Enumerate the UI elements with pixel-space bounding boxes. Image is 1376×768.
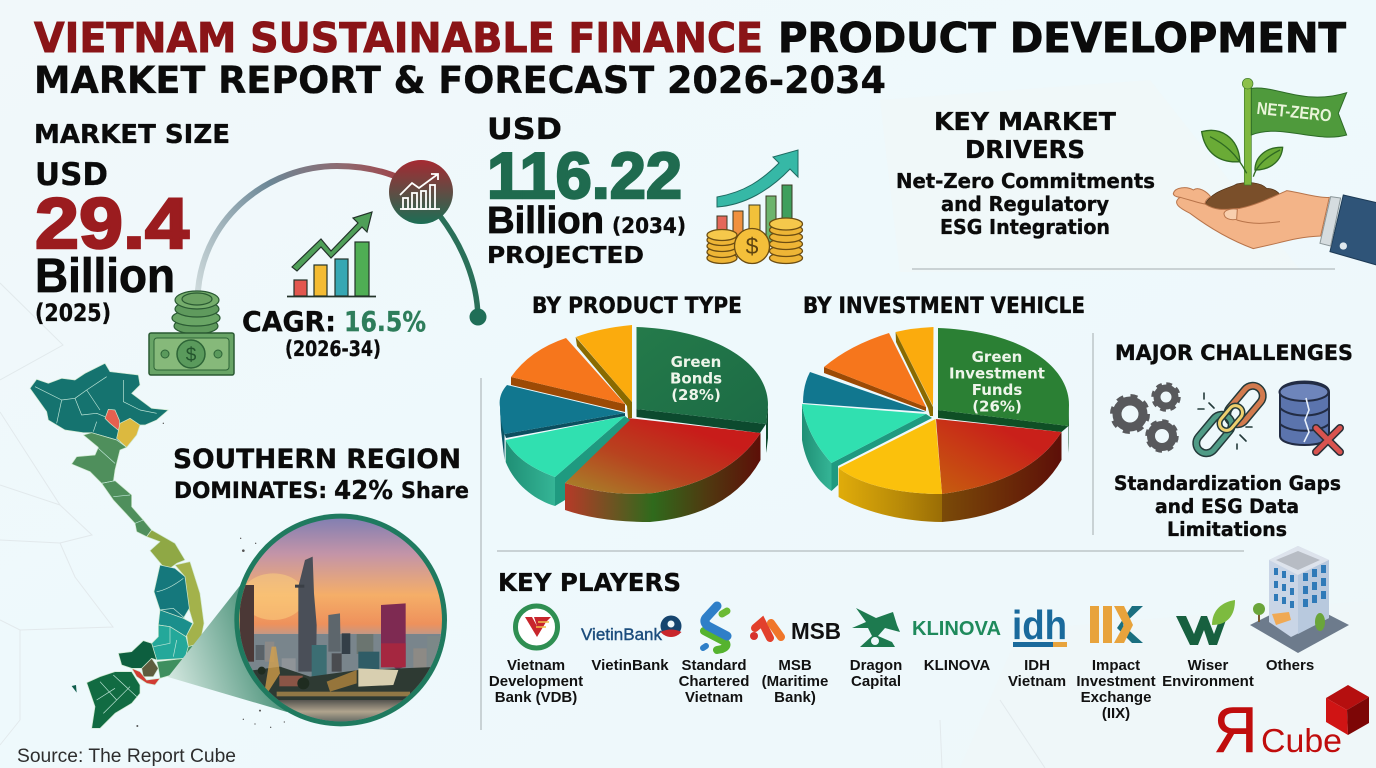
challenges text [1114,472,1341,541]
pie chart: by investment vehicle [802,327,1069,522]
market size block: MARKET SIZE [34,120,230,150]
player: Wiser [1162,600,1254,690]
projected value block: Billion [487,200,604,242]
projected value block: (2034) [612,214,686,238]
CAGR: (2026-34) [285,337,381,361]
icon: damaged database [1280,382,1340,452]
southern region heading [173,444,469,506]
player: MSB: MSB [791,618,841,644]
player: Others [1250,546,1349,674]
southern region heading: SOUTHERN REGION [173,444,461,475]
pie label: green investment funds: Funds [972,381,1022,399]
logo: Wiser W [1176,600,1235,645]
player: IIX: Impact [1092,657,1140,674]
player: IDH: IDH [1024,657,1050,674]
CAGR: CAGR: [242,305,336,338]
player: IIX: (IIX) [1102,705,1130,722]
CAGR: 16.5% [344,305,426,338]
player: MSB: (Maritime [762,673,828,690]
pie label: green bonds: Bonds [670,370,722,388]
player: VietinBank [581,616,682,674]
player: IDH [1008,602,1067,690]
key players heading: KEY PLAYERS [498,568,681,597]
pie label: green investment funds: (26%) [972,398,1022,416]
player: MSB [750,618,841,706]
icon: bar chart with arrow [287,212,376,296]
player: Standard Chartered: Vietnam [685,689,743,706]
player: VietinBank: VietinBank [591,657,669,674]
key market drivers: ESG Integration [940,215,1110,239]
source note: Source: The Report Cube [17,746,236,767]
logo: IIX [1090,606,1143,643]
player: VDB: Development [489,673,583,690]
market size block: 29.4 [35,185,190,264]
pie label: green investment funds: Green [972,348,1022,366]
title: VIETNAM SUSTAINABLE FINANCE [34,14,763,62]
pie label: green bonds: Green [671,353,721,371]
icon: office building [1250,546,1349,653]
player: KLINOVA: KLINOVA [912,618,1001,640]
player: IDH: Vietnam [1008,673,1066,690]
projected value block: USD [487,112,562,146]
callout cone to city [168,578,287,712]
icon: hand holding net-zero sprout [1173,78,1376,265]
logo: MSB mark [750,622,781,640]
city photo circle [230,514,450,726]
chart heading: by investment vehicle: BY INVESTMENT VEHICLE [803,294,1085,319]
player: MSB: Bank) [774,689,816,706]
key market drivers [896,107,1155,239]
icon: money stack: $ [186,345,197,366]
player: Others: Others [1266,657,1314,674]
major challenges heading: MAJOR CHALLENGES [1115,341,1353,365]
icon: red cube [1326,685,1369,735]
icon: coins and rising arrow [707,150,802,264]
key market drivers: and Regulatory [941,192,1109,216]
challenges text: Limitations [1167,518,1287,541]
market size block: (2025) [35,299,111,327]
player: Dragon Capital [850,608,902,690]
logo: dragon [852,608,900,647]
player: Standard Chartered: Standard [681,657,747,674]
player: Wiser: Wiser [1188,657,1228,674]
player: IIX [1076,606,1156,722]
player: Standard Chartered: Chartered [679,673,749,690]
key market drivers: DRIVERS [965,135,1085,164]
player: IIX: Investment [1076,673,1156,690]
chart heading: by product type: BY PRODUCT TYPE [532,294,742,319]
player: VietinBank: VietinBank [581,625,662,644]
logo: VDB [516,606,558,648]
logo: Standard Chartered [703,606,727,650]
player: IIX: Exchange [1081,689,1151,706]
projected value block [487,112,686,269]
key market drivers: KEY MARKET [934,107,1116,136]
southern region heading: 42% [334,476,393,506]
player: Wiser: Environment [1162,673,1254,690]
dividers [481,269,1335,730]
pie label: green investment funds: Investment [949,364,1045,382]
growth arc [198,166,486,326]
player: Standard Chartered [679,606,749,706]
market size block: USD [35,157,108,193]
market size block [34,120,230,327]
player: Dragon Capital: Capital [851,673,901,690]
challenges text: Standardization Gaps [1114,472,1341,495]
player: VDB: Vietnam [507,657,565,674]
map of Vietnam [30,363,285,728]
icon: chart badge [389,160,453,224]
player: KLINOVA [912,618,1001,674]
projected value block: 116.22 [487,139,682,212]
CAGR [242,305,426,361]
southern region heading: DOMINATES: [174,479,327,504]
RCube logo: Я [1214,694,1257,766]
southern region heading: Share [401,479,469,504]
RCube logo: Cube [1261,722,1342,759]
player: IDH: idh [1012,602,1067,648]
icon: broken chain [1192,382,1267,457]
icon: money stack [149,291,234,375]
market size block: Billion [35,250,175,303]
player: Dragon Capital: Dragon [850,657,902,674]
RCube logo [1214,685,1369,766]
icon: coins and rising arrow: $ [746,233,759,259]
key market drivers: Net-Zero Commitments [896,169,1155,193]
title: PRODUCT DEVELOPMENT [778,14,1346,62]
projected value block: PROJECTED [487,243,644,269]
icon: gears [1112,384,1178,450]
player: MSB: MSB [778,657,812,674]
title: MARKET REPORT & FORECAST 2026-2034 [34,59,886,102]
icon: hand holding net-zero sprout: NET-ZERO [1256,98,1332,126]
player: VDB: Bank (VDB) [495,689,577,706]
pie label: green bonds: (28%) [671,386,721,404]
pie chart: by product type [500,325,768,522]
logo mark: VietinBank [660,616,682,637]
challenges text: and ESG Data [1155,495,1299,518]
title [34,14,1346,102]
player: VDB [489,606,583,706]
player: KLINOVA: KLINOVA [924,657,990,674]
